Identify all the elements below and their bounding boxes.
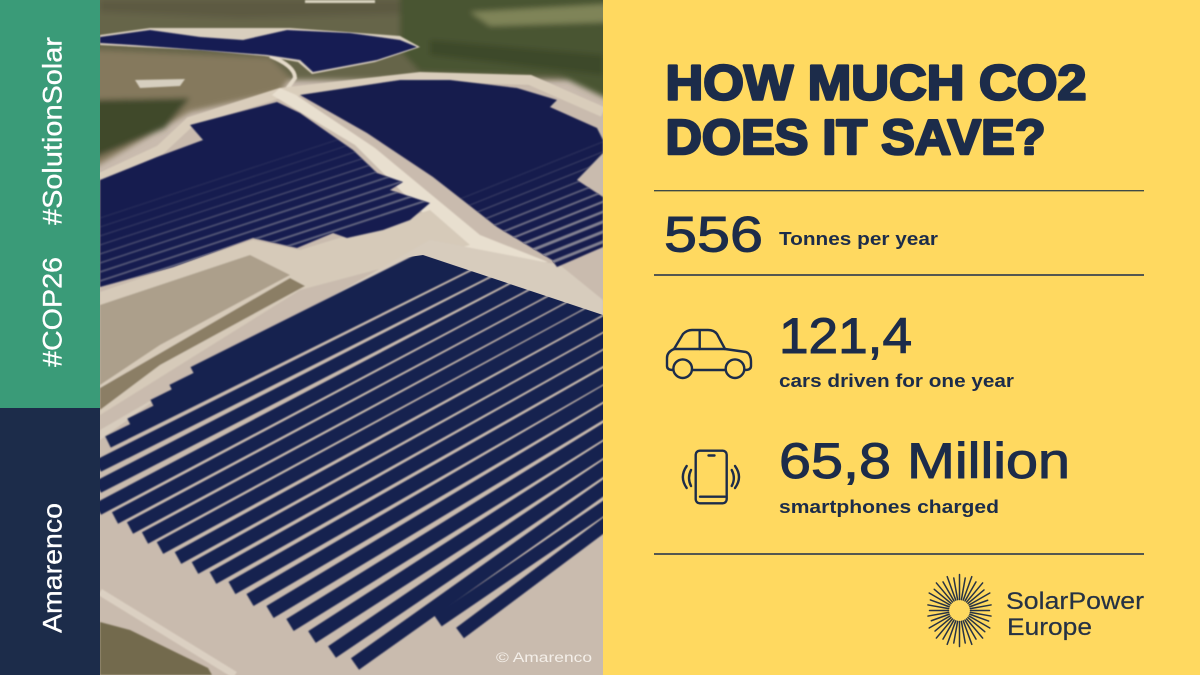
logo: SolarPower Europe (928, 574, 1144, 646)
icon: smartphone (683, 451, 739, 503)
hashtag: SolutionSolar: #SolutionSolar (38, 37, 68, 225)
solar array: left section (100, 101, 430, 288)
stat: tonnes per year: 556 (664, 206, 763, 262)
sidebar label: Amarenco: Amarenco (38, 503, 68, 633)
title: HOW MUCH CO2 (666, 56, 1086, 110)
photo credit: © Amarenco (496, 650, 592, 665)
stat: smartphones charged: smartphones charged (779, 496, 999, 517)
logo text: SolarPower (1006, 588, 1144, 615)
logo text (1006, 588, 1144, 641)
stat: cars driven: cars driven for one year (779, 370, 1014, 391)
panel: green sidebar (0, 0, 100, 408)
icon: sun (928, 574, 991, 646)
solar array: upper right section (300, 79, 603, 268)
stat: smartphones charged: 65,8 Million (779, 433, 1070, 489)
stat: tonnes per year (664, 206, 938, 262)
title (666, 56, 1086, 165)
panel: aerial photo of solar farm (90, 0, 623, 675)
panel: yellow background (603, 0, 1200, 675)
hashtag: COP26: #COP26 (38, 257, 68, 367)
icon: car (667, 330, 751, 378)
stat: cars driven (779, 308, 1014, 391)
stat: cars driven: 121,4 (779, 308, 912, 364)
solar array: top lake section (100, 30, 417, 72)
stat: smartphones charged (779, 433, 1070, 517)
stat: tonnes per year: Tonnes per year (779, 228, 938, 249)
title: DOES IT SAVE? (666, 111, 1046, 165)
logo text: Europe (1007, 614, 1092, 641)
panel: navy sidebar (0, 408, 100, 675)
solar array: lower large section (100, 255, 603, 670)
